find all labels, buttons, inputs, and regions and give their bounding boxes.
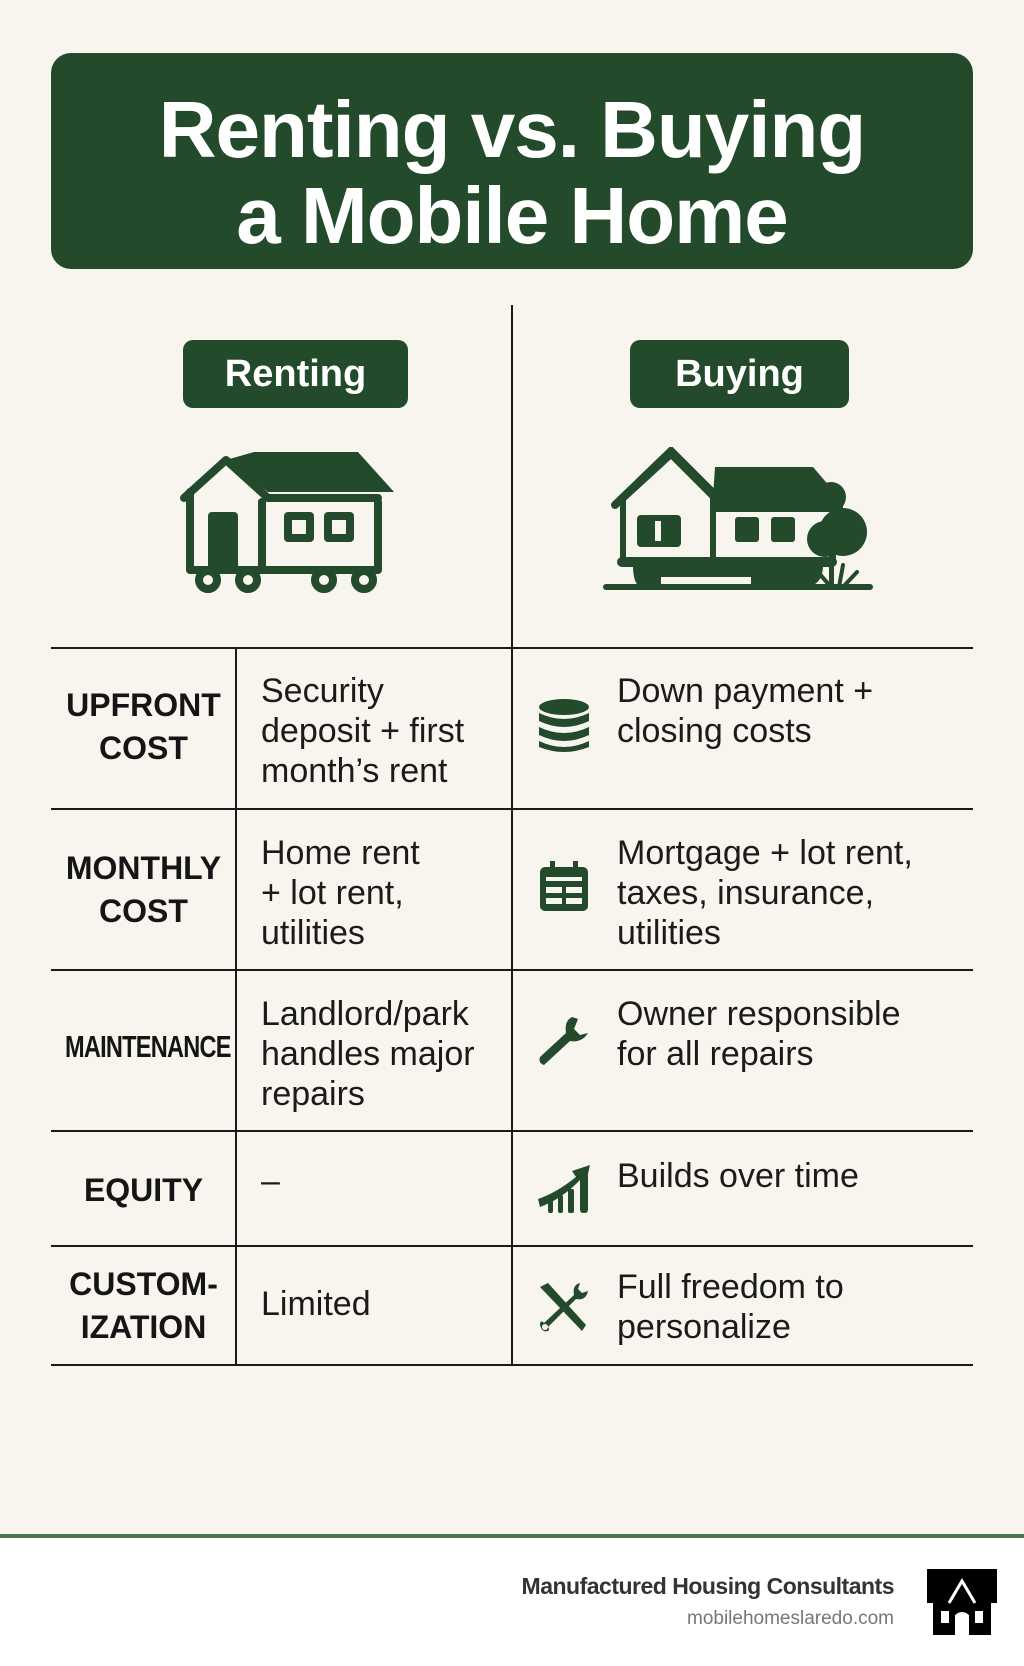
row: upfront cost	[66, 672, 873, 790]
row: upfront cost: COST	[99, 730, 188, 766]
heading: Buying	[630, 340, 849, 408]
footer text	[522, 1573, 894, 1629]
footer	[0, 1534, 1024, 1666]
row: customization: personalize	[617, 1308, 791, 1346]
heading: Renting: Renting	[225, 353, 366, 395]
title: a Mobile Home	[236, 171, 788, 260]
row: equity	[84, 1157, 859, 1213]
row: equity: –	[261, 1162, 280, 1200]
row: maintenance	[65, 995, 900, 1113]
row: monthly cost: + lot rent,	[261, 874, 404, 912]
row: maintenance: repairs	[261, 1075, 365, 1113]
row: monthly cost	[66, 834, 913, 952]
heading: Renting	[183, 340, 408, 408]
row: upfront cost: month’s rent	[261, 752, 447, 790]
row: upfront cost: Security	[261, 672, 384, 710]
row: monthly cost: taxes, insurance,	[617, 874, 874, 912]
row: maintenance: Landlord/park	[261, 995, 469, 1033]
row: maintenance: MAINTENANCE	[65, 1029, 231, 1064]
row: upfront cost: closing costs	[617, 712, 812, 750]
footer text: Manufactured Housing Consultants	[522, 1573, 894, 1599]
row: upfront cost: Down payment +	[617, 672, 873, 710]
row: equity: Builds over time	[617, 1157, 859, 1195]
row: customization: Limited	[261, 1285, 371, 1323]
row: customization: CUSTOM-	[69, 1266, 218, 1302]
row: upfront cost: deposit + first	[261, 712, 464, 750]
row: monthly cost: Home rent	[261, 834, 420, 872]
row: customization	[69, 1266, 844, 1346]
row: monthly cost: Mortgage + lot rent,	[617, 834, 913, 872]
row: customization: IZATION	[81, 1309, 206, 1345]
row: monthly cost: utilities	[261, 914, 365, 952]
row: monthly cost: utilities	[617, 914, 721, 952]
row: maintenance: handles major	[261, 1035, 475, 1073]
icon: owned mobile home with tree	[603, 447, 873, 590]
row: customization: Full freedom to	[617, 1268, 844, 1306]
title	[51, 53, 973, 269]
row: maintenance: Owner responsible	[617, 995, 900, 1033]
vertical divider	[511, 305, 513, 1365]
footer text: mobilehomeslaredo.com	[687, 1608, 894, 1629]
title: Renting vs. Buying	[159, 85, 865, 174]
row: monthly cost: COST	[99, 893, 188, 929]
icon: rental mobile home	[180, 452, 394, 593]
row: equity: EQUITY	[84, 1172, 203, 1208]
heading: Buying: Buying	[675, 353, 804, 395]
row: maintenance: for all repairs	[617, 1035, 814, 1073]
icon: logo	[927, 1569, 997, 1635]
row: monthly cost: MONTHLY	[66, 850, 221, 886]
row: upfront cost: UPFRONT	[66, 687, 221, 723]
